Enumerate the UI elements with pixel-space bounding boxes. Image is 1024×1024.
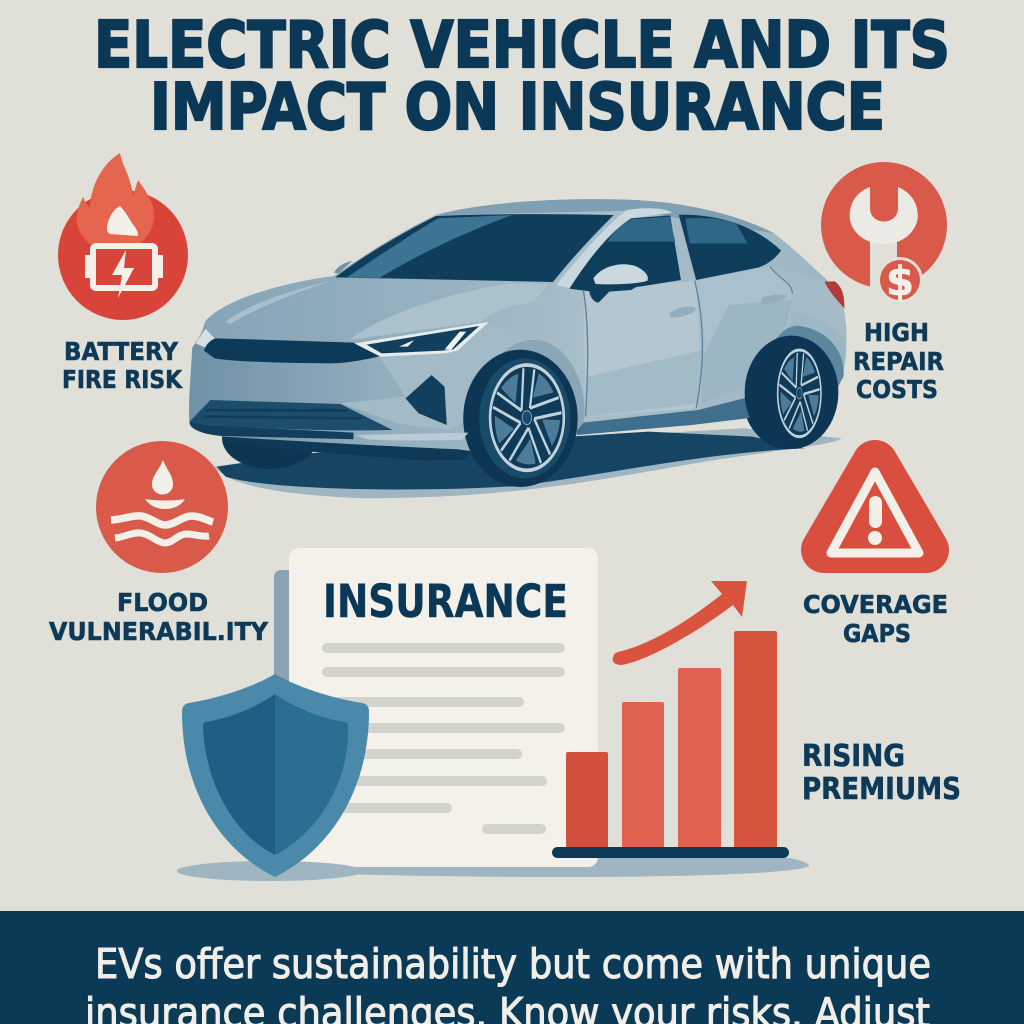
icon: flood water drop <box>96 441 228 573</box>
label: rising premiums: RISING <box>802 739 905 774</box>
front wheel <box>463 350 578 487</box>
fog vent <box>406 375 447 425</box>
label: high repair costs: COSTS <box>856 375 938 404</box>
label: battery fire risk: BATTERY <box>64 337 179 366</box>
car ground shadow <box>215 428 841 498</box>
back page <box>274 570 289 690</box>
bar chart <box>552 631 789 858</box>
footer text: EVs offer sustainability but come with unique <box>95 940 931 988</box>
front wheel arch <box>475 340 584 457</box>
A-pillar <box>556 208 672 288</box>
label: coverage gaps <box>803 590 948 648</box>
label: flood vulnerability <box>49 588 269 646</box>
underbody <box>219 423 484 461</box>
side skirt <box>577 380 765 435</box>
car body <box>189 199 846 452</box>
tail light <box>824 281 844 308</box>
label: high repair costs <box>853 318 944 404</box>
label: rising premiums: PREMIUMS <box>802 772 961 807</box>
icon: wrench and dollar <box>821 162 947 305</box>
bars <box>566 752 608 848</box>
side mirror <box>589 264 648 303</box>
rear wheel and front-left wheel <box>222 336 833 469</box>
document heading: INSURANCE <box>323 575 568 628</box>
car illustration <box>189 199 846 498</box>
footer band <box>0 911 1024 1024</box>
page <box>289 548 598 867</box>
roof panel <box>436 199 774 233</box>
arrow: rising trend <box>613 581 747 665</box>
label: flood vulnerability: FLOOD <box>117 588 208 617</box>
icon: wrench and dollar: $ <box>886 259 914 305</box>
label: coverage gaps: GAPS <box>843 619 911 648</box>
rear wheel <box>745 336 838 449</box>
label: rising premiums <box>802 739 961 807</box>
icon: warning triangle <box>824 463 926 553</box>
icon: shield <box>182 674 369 877</box>
left headlight <box>196 328 215 347</box>
windshield <box>334 214 614 282</box>
title <box>94 9 950 145</box>
rear wheel arch <box>757 326 844 423</box>
grille <box>204 338 384 363</box>
label: high repair costs: HIGH <box>864 318 929 347</box>
long ground shadow <box>300 858 809 877</box>
insurance document <box>274 548 598 867</box>
label: battery fire risk: FIRE RISK <box>62 365 183 394</box>
hood <box>205 276 553 342</box>
label: coverage gaps: COVERAGE <box>803 590 948 619</box>
text lines <box>322 643 565 834</box>
label: battery fire risk <box>62 337 183 394</box>
door seams and handles <box>583 267 792 417</box>
shield shadow <box>177 861 363 881</box>
side windows <box>569 215 781 292</box>
label: high repair costs: REPAIR <box>853 347 944 376</box>
headlight <box>354 322 489 357</box>
title: IMPACT ON INSURANCE <box>150 71 885 145</box>
front bumper highlight <box>340 323 527 430</box>
label: flood vulnerability: VULNERABIL.ITY <box>49 617 269 646</box>
icon: battery fire <box>58 153 188 320</box>
lower intake <box>190 400 468 440</box>
door panels <box>583 281 703 417</box>
chart base <box>552 847 789 858</box>
